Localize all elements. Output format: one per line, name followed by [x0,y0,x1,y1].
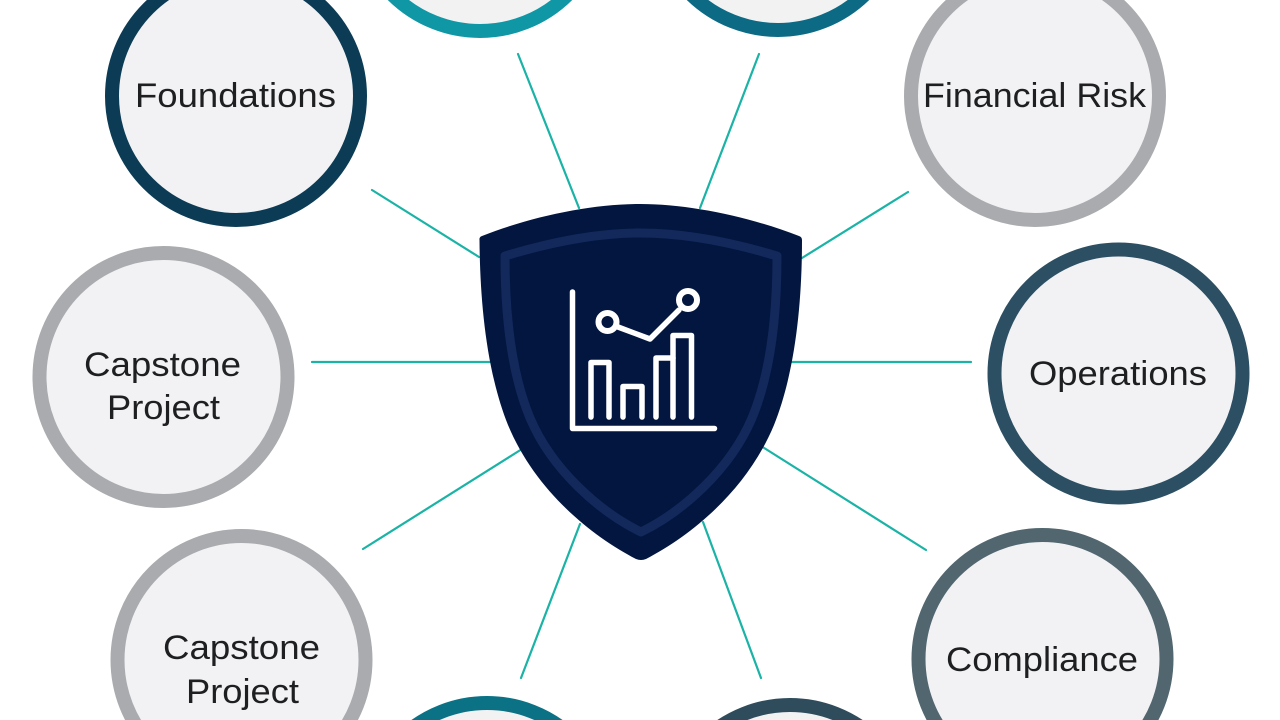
circle: top right, cropped dark teal module [654,0,902,30]
circle: bottom right, cropped slate module [666,705,914,720]
circle: Capstone Project, bottom left [118,536,366,720]
circle: bottom left, cropped teal module [363,703,611,720]
circle: Financial Risk: Financial Risk [923,77,1147,115]
circle: Capstone Project, left: Capstone [84,346,241,384]
circle: Operations [994,250,1242,498]
connector lines from shield to module circles [312,54,971,678]
circle: top left, cropped teal module [356,0,604,31]
circle: Operations: Operations [1029,355,1207,393]
icon: bar chart with trend line [572,291,714,428]
circle: Foundations [112,0,360,220]
circle: Compliance [918,535,1166,720]
circle: Capstone Project, bottom left: Capstone [163,629,320,667]
circle: Capstone Project, left [40,253,288,501]
circle: Capstone Project, bottom left: Project [186,673,300,711]
circle: Compliance: Compliance [946,641,1138,679]
central shield [479,204,802,560]
circle: Capstone Project, left: Project [107,389,221,427]
circle: Financial Risk [911,0,1159,220]
circle: Foundations: Foundations [135,77,336,115]
shield inner band [505,233,777,532]
